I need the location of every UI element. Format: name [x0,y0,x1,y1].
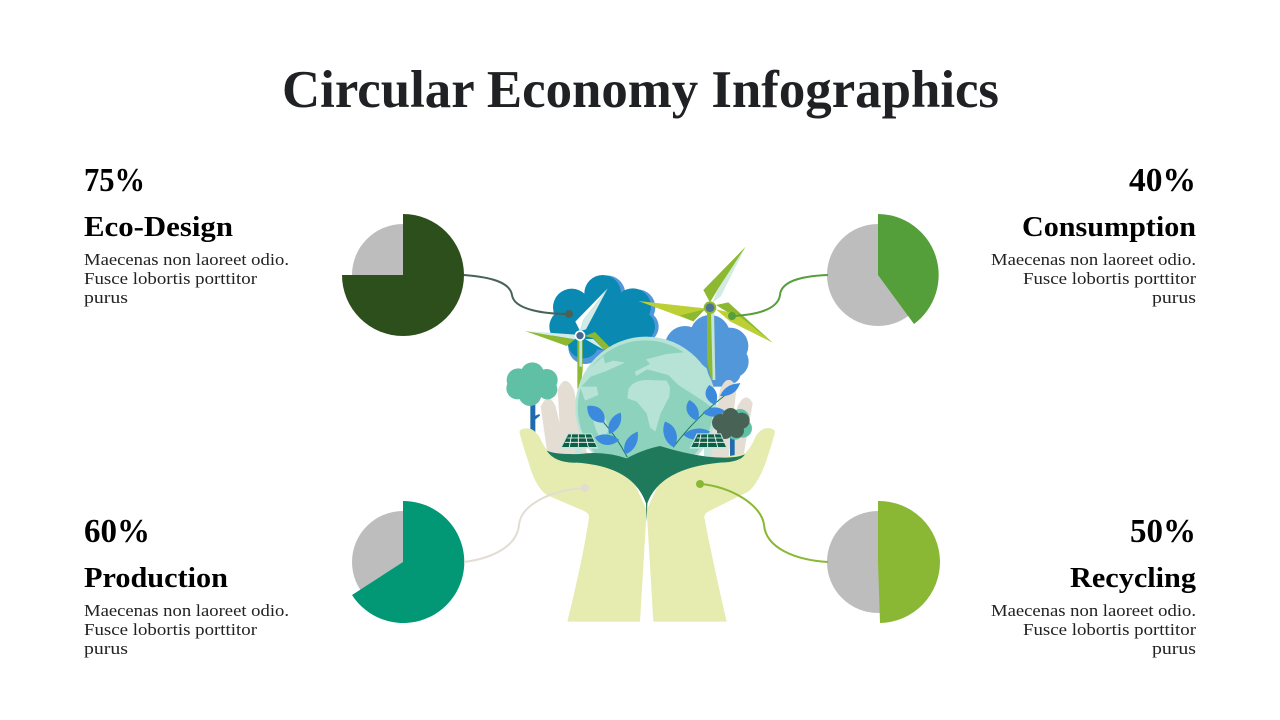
description: recycling [991,601,1196,658]
description: recycling: purus [1152,639,1196,658]
pie chart: 40% [827,214,939,326]
connector: recycling [696,480,828,562]
connector: consumption [728,275,828,320]
description: recycling: Maecenas non laoreet odio. [991,601,1196,620]
pie chart: 75% [342,214,464,336]
description: eco-design [84,250,289,307]
panel: eco-design [84,162,573,336]
description: eco-design: Maecenas non laoreet odio. [84,250,289,269]
heading: consumption: Consumption [1022,211,1196,243]
leaves [587,383,740,457]
panel: consumption [728,162,1196,326]
description: production: Maecenas non laoreet odio. [84,601,289,620]
cloud: left [549,275,659,364]
description: production [84,601,289,658]
description: production: purus [84,639,128,658]
solar panel: right [689,433,728,458]
solar panel: left [560,433,598,458]
cloud: right [665,315,749,387]
connector: production [464,484,589,562]
tree: teal [506,362,558,433]
wind turbine: right [638,247,773,380]
globe [575,337,717,478]
stat: 40%: 40% [1129,162,1196,199]
stat: 50%: 50% [1130,513,1196,550]
description: eco-design: Fusce lobortis porttitor [84,269,257,288]
pie chart: 60% [352,501,464,623]
description: consumption: Maecenas non laoreet odio. [991,250,1196,269]
panel: production [84,484,589,658]
panel: recycling [696,480,1197,658]
description: eco-design: purus [84,288,128,307]
description: production: Fusce lobortis porttitor [84,620,257,639]
description: consumption: Fusce lobortis porttitor [1023,269,1196,288]
heading: recycling: Recycling [1070,562,1197,594]
hands [519,428,775,622]
stat: 75%: 75% [84,162,145,199]
heading: eco-design: Eco-Design [84,211,233,243]
title: Circular Economy Infographics [282,61,999,119]
wind turbine: left [525,288,610,388]
fingers [541,380,753,460]
ground [547,446,745,522]
description: recycling: Fusce lobortis porttitor [1023,620,1196,639]
heading: production: Production [84,562,228,594]
description: consumption [991,250,1196,307]
illustration: hands holding the earth [506,247,775,622]
right hand [647,428,775,622]
left hand [519,428,647,622]
pie chart: 50% [827,501,940,623]
description: consumption: purus [1152,288,1196,307]
connector: eco-design [464,275,573,318]
stat: 60%: 60% [84,513,150,550]
tree: dark [712,408,752,457]
